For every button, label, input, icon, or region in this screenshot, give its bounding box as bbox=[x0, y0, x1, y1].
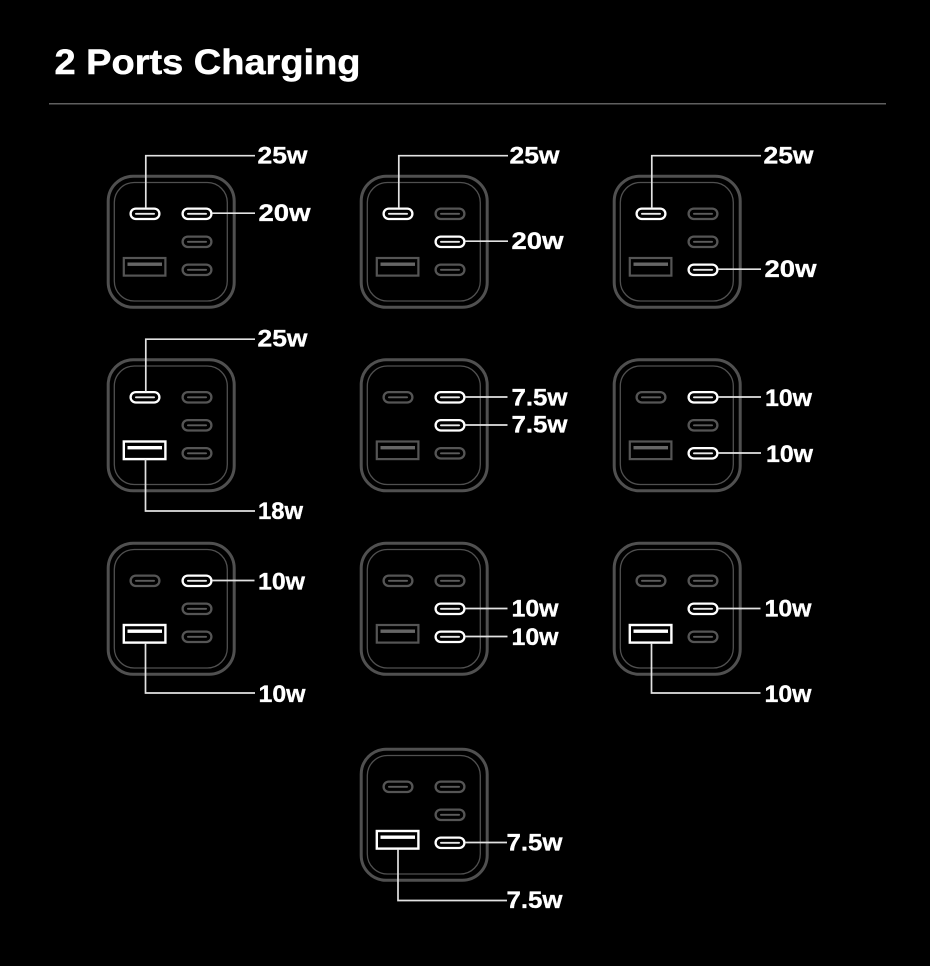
panel: 7.5w + 7.5w: 7.5w bbox=[512, 384, 568, 412]
panel: 7.5w + 7.5w: 7.5w bbox=[512, 412, 568, 439]
panel: 25w + 20w (top port): 25w bbox=[258, 142, 309, 170]
panel: 10w + 10w (top and bottom ports): 10w bbox=[766, 441, 814, 468]
title: 2 Ports Charging bbox=[54, 42, 360, 82]
panel: 10w + 10w (middle and bottom ports): 10w bbox=[512, 624, 559, 651]
panel: 25w + 20w (bottom port): 20w bbox=[764, 256, 818, 283]
panel: 25w + 18w USB-A bbox=[108, 326, 309, 525]
panel: 10w + 10w (top and bottom ports) bbox=[614, 360, 814, 491]
panel: 25w + 20w (bottom port): 25w bbox=[764, 142, 815, 170]
panel: 25w + 20w (middle port): 20w bbox=[512, 228, 565, 255]
panel: 10w middle port + 10w USB-A bbox=[614, 543, 812, 708]
panel: 25w + 20w (middle port) bbox=[361, 142, 565, 307]
panel: 10w + 10w (top and bottom ports): 10w bbox=[765, 385, 813, 412]
panel: 10w + 10w (middle and bottom ports) bbox=[361, 543, 559, 674]
panel: 10w top port + 10w USB-A: 10w bbox=[258, 681, 306, 708]
panel: 10w top port + 10w USB-A bbox=[108, 543, 306, 708]
panel: 7.5w bottom port + 7.5w USB-A: 7.5w bbox=[506, 887, 563, 914]
panel: 7.5w bottom port + 7.5w USB-A bbox=[361, 749, 563, 914]
panel: 7.5w bottom port + 7.5w USB-A: 7.5w bbox=[506, 829, 563, 856]
panel: 10w middle port + 10w USB-A: 10w bbox=[764, 595, 812, 622]
panel: 25w + 18w USB-A: 25w bbox=[258, 326, 309, 352]
panel: 10w middle port + 10w USB-A: 10w bbox=[764, 681, 812, 708]
header rule bbox=[49, 103, 886, 104]
panel: 10w top port + 10w USB-A: 10w bbox=[258, 568, 306, 595]
panel: 25w + 20w (middle port): 25w bbox=[510, 142, 561, 170]
panel: 25w + 20w (bottom port) bbox=[614, 142, 818, 307]
panel: 25w + 20w (top port): 20w bbox=[258, 200, 312, 227]
panel: 7.5w + 7.5w bbox=[361, 360, 568, 491]
panel: 25w + 20w (top port) bbox=[108, 142, 312, 307]
panel: 25w + 18w USB-A: 18w bbox=[258, 498, 304, 525]
panel: 10w + 10w (middle and bottom ports): 10w bbox=[512, 596, 559, 623]
